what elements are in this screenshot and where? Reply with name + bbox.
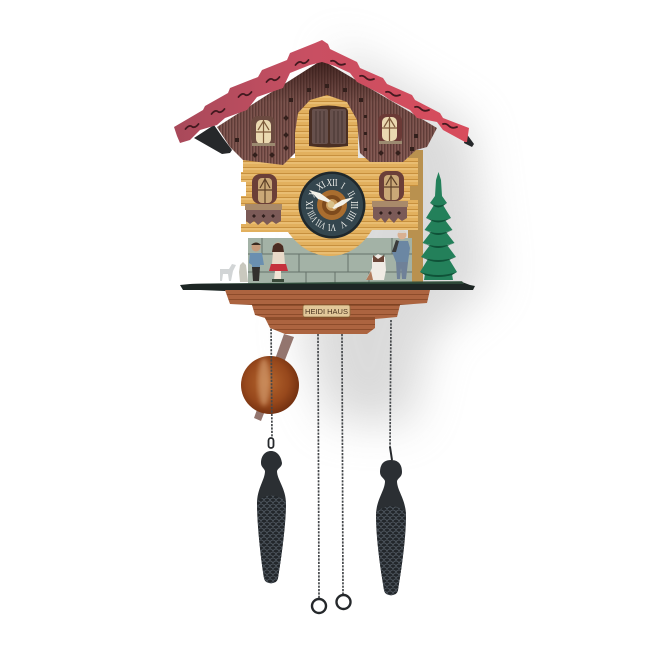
clock dial [298,172,366,238]
stone wall [248,238,412,284]
roman numerals: X [307,188,320,200]
base [225,290,430,334]
roman numerals: IX [305,200,316,210]
roman numerals: I [339,181,347,192]
figure: old man [392,230,410,279]
figure: goats [220,262,248,282]
name plate: HEIDI HAUS [305,307,348,316]
upper pine panel [295,94,358,170]
chain: centre left [318,334,319,598]
window: lower right with balcony [372,171,408,223]
pendulum [241,334,299,421]
chain: centre right [342,334,343,594]
gable [217,60,437,165]
facade planks [241,158,418,256]
dial face [298,172,366,238]
chain: right [390,320,391,448]
window: lower left with balcony [245,174,282,225]
roman numerals: VII [314,216,328,231]
window: top centre shutters [309,106,348,148]
roof [174,40,469,143]
platform [180,281,475,291]
roman numerals: IIII [343,209,358,223]
eave bracket right [464,133,474,147]
figure: dog [366,254,386,280]
wall shadow [300,45,490,425]
roman numerals: V [337,217,348,230]
pendulum bob [241,356,299,414]
pendulum rod [254,334,294,421]
pull rings [312,595,350,613]
ring right [336,595,350,609]
weight: left pine cone [257,438,286,583]
tree [420,172,457,280]
roof cut-outs [186,60,457,129]
ring left [312,599,326,613]
eave bracket left [194,125,232,154]
name plate [303,305,350,317]
roman numerals: XII [326,178,338,189]
gable cut-outs [235,84,418,158]
roman numerals: VI [328,221,336,232]
window: upper left [251,116,275,146]
roman numerals: II [345,189,357,199]
roman numerals [305,178,359,232]
chain: left front [271,322,272,438]
clock hands [309,190,354,209]
chains [271,320,391,598]
roman numerals: XI [315,179,328,193]
weight: right pine cone [376,447,406,595]
clock side wall [408,150,423,285]
figure: girl [269,242,288,282]
roman numerals: III [348,201,359,209]
window: upper right [378,114,402,144]
roman numerals: VIII [306,208,321,223]
figure: boy [249,242,264,281]
dark eave shading [217,60,437,165]
